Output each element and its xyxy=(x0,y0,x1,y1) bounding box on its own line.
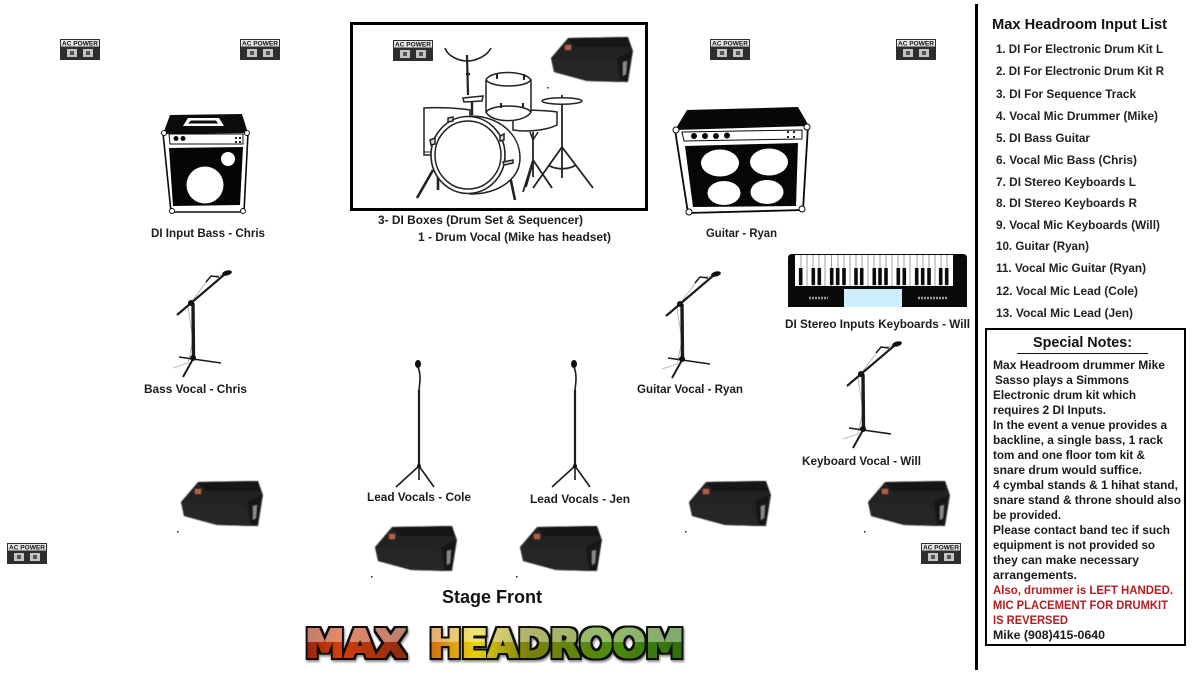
drum input labels xyxy=(378,213,611,244)
input list items: 2. DI For Electronic Drum Kit R xyxy=(996,64,1164,78)
label: bass vocal: Bass Vocal - Chris xyxy=(144,382,247,396)
input list items: 11. Vocal Mic Guitar (Ryan) xyxy=(996,261,1146,275)
mic stand: guitar vocal xyxy=(662,270,721,378)
mic stand: lead vocal Jen xyxy=(552,360,590,487)
AC power outlet: AC POWER xyxy=(923,545,959,552)
floor monitor xyxy=(864,481,950,532)
AC power outlet xyxy=(393,40,433,61)
notes body: snare drum would suffice. xyxy=(993,463,1142,477)
AC power outlet: AC POWER xyxy=(395,42,431,49)
special notes panel xyxy=(986,329,1185,645)
input list xyxy=(992,17,1167,320)
notes body: Please contact band tec if such xyxy=(993,523,1170,537)
input list items: 6. Vocal Mic Bass (Chris) xyxy=(996,153,1137,167)
notes body: be provided. xyxy=(993,508,1061,522)
AC power outlet: AC POWER xyxy=(712,41,748,48)
notes body: Max Headroom drummer Mike xyxy=(993,358,1165,372)
AC power outlet xyxy=(896,39,936,60)
input list items: 9. Vocal Mic Keyboards (Will) xyxy=(996,218,1160,232)
drum input labels: 1 - Drum Vocal (Mike has headset) xyxy=(418,230,611,244)
input list items: 3. DI For Sequence Track xyxy=(996,87,1136,101)
notes body: requires 2 DI Inputs. xyxy=(993,403,1106,417)
mic stand: lead vocal Cole xyxy=(396,360,434,487)
input list items: 13. Vocal Mic Lead (Jen) xyxy=(996,306,1133,320)
notes body: Also, drummer is LEFT HANDED. xyxy=(993,583,1173,597)
keyboard xyxy=(788,254,967,307)
AC power outlet: AC POWER xyxy=(898,41,934,48)
vertical divider xyxy=(975,4,978,670)
logo: MAX xyxy=(305,622,406,666)
floor monitor xyxy=(516,526,602,578)
input list items: 4. Vocal Mic Drummer (Mike) xyxy=(996,109,1158,123)
input list items: 1. DI For Electronic Drum Kit L xyxy=(996,42,1163,56)
notes body: Mike (908)415-0640 xyxy=(993,628,1105,642)
notes body: MIC PLACEMENT FOR DRUMKIT xyxy=(993,598,1169,612)
input list items: 7. DI Stereo Keyboards L xyxy=(996,175,1136,189)
label: lead vocals Jen: Lead Vocals - Jen xyxy=(530,492,630,506)
stage front heading: Stage Front xyxy=(442,587,542,607)
notes body: they can make necessary xyxy=(993,553,1139,567)
mic stand: bass vocal xyxy=(173,269,232,377)
drum input labels: 3- DI Boxes (Drum Set & Sequencer) xyxy=(378,213,583,227)
AC power outlet xyxy=(921,543,961,564)
notes body: tom and one floor tom kit & xyxy=(993,448,1145,462)
label: guitar vocal: Guitar Vocal - Ryan xyxy=(637,382,743,396)
AC power outlet xyxy=(60,39,100,60)
input list items: 10. Guitar (Ryan) xyxy=(996,239,1089,253)
mic stand: keyboard vocal xyxy=(843,340,902,448)
AC power outlet: AC POWER xyxy=(9,545,45,552)
special notes heading: Special Notes: xyxy=(1033,335,1132,351)
notes body: In the event a venue provides a xyxy=(993,418,1167,432)
AC power outlet: AC POWER xyxy=(62,41,98,48)
input list items: 12. Vocal Mic Lead (Cole) xyxy=(996,284,1138,298)
label: DI input bass: DI Input Bass - Chris xyxy=(151,226,265,240)
input list title: Max Headroom Input List xyxy=(992,17,1167,33)
floor monitor xyxy=(177,481,263,532)
notes body: 4 cymbal stands & 1 hihat stand, xyxy=(993,478,1178,492)
notes body: arrangements. xyxy=(993,568,1077,582)
input list items: 8. DI Stereo Keyboards R xyxy=(996,196,1137,210)
label: keyboard vocal: Keyboard Vocal - Will xyxy=(802,454,921,468)
label: guitar: Guitar - Ryan xyxy=(706,226,777,240)
notes body: Electronic drum kit which xyxy=(993,388,1136,402)
notes body: backline, a single bass, 1 rack xyxy=(993,433,1163,447)
notes body: Sasso plays a Simmons xyxy=(995,373,1129,387)
notes body: equipment is not provided so xyxy=(993,538,1155,552)
floor monitor xyxy=(371,526,457,578)
label: keyboards: DI Stereo Inputs Keyboards - Will xyxy=(785,317,970,331)
notes body: snare stand & throne should also xyxy=(993,493,1181,507)
notes body xyxy=(993,358,1181,642)
bass amp xyxy=(162,114,250,214)
AC power outlet: AC POWER xyxy=(242,41,278,48)
input list items xyxy=(996,42,1164,320)
input list items: 5. DI Bass Guitar xyxy=(996,131,1090,145)
floor monitor xyxy=(685,481,771,532)
AC power outlet xyxy=(7,543,47,564)
drum riser box with kit xyxy=(352,24,646,210)
drum monitor xyxy=(547,37,633,88)
notes body: IS REVERSED xyxy=(993,613,1068,627)
logo: HEADROOM xyxy=(429,622,684,666)
AC power outlet xyxy=(710,39,750,60)
drum kit xyxy=(417,48,593,200)
logo xyxy=(305,622,684,666)
guitar amp xyxy=(673,107,810,215)
AC power outlet xyxy=(240,39,280,60)
label: lead vocals Cole: Lead Vocals - Cole xyxy=(367,490,471,504)
